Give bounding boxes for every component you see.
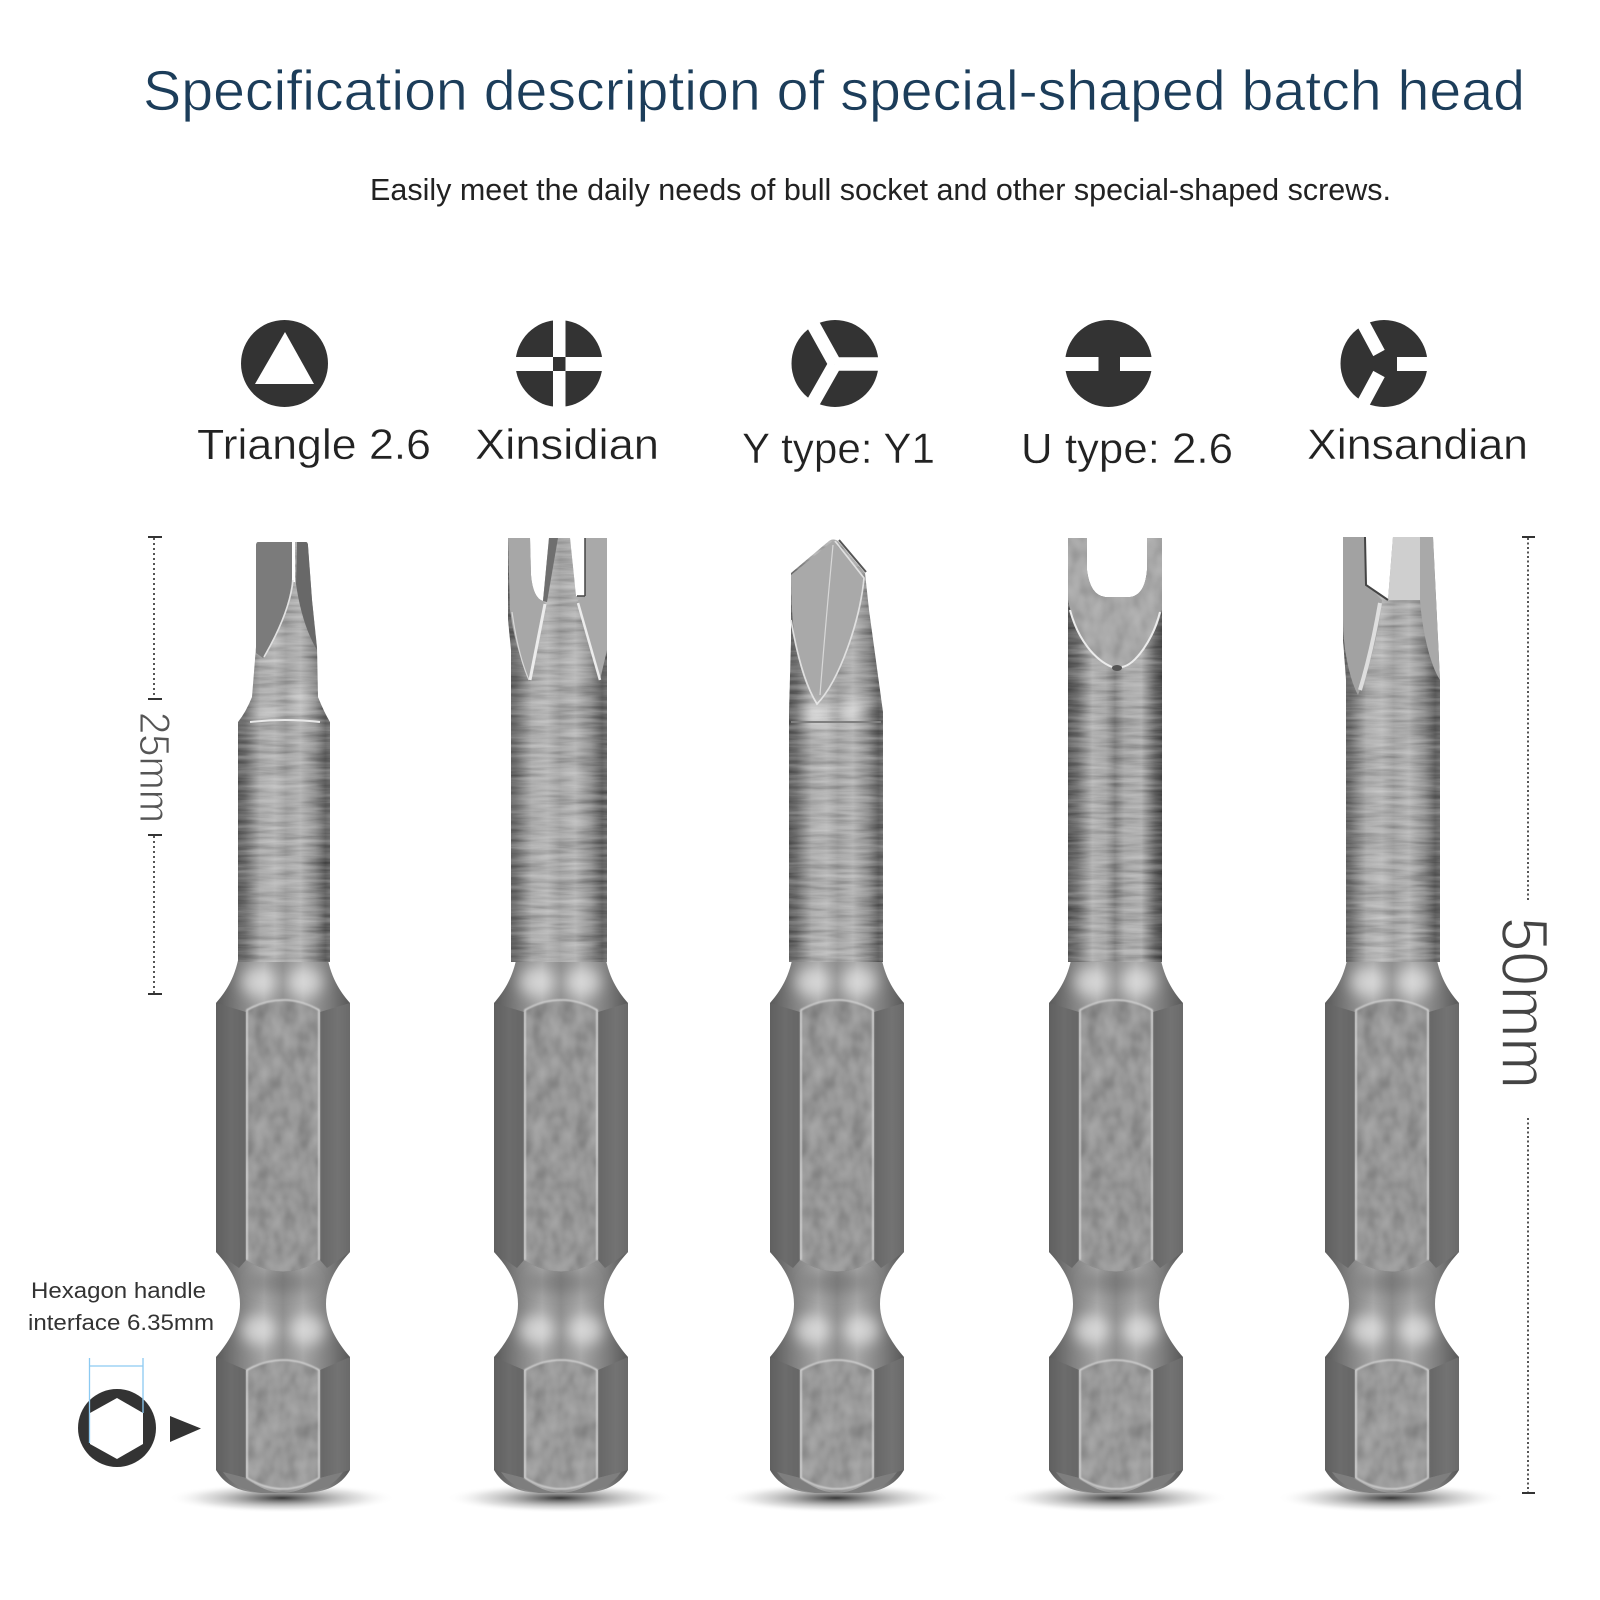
bit 2: Xinsidian — [446, 538, 674, 1513]
icon: triangle head — [241, 320, 328, 407]
dimension: 50mm total length — [1488, 537, 1562, 1493]
title: Specification description of special-shaped batch head — [143, 59, 1525, 123]
label: Xinsandian: Xinsandian — [1307, 421, 1528, 469]
arrow: pointer to hex end — [170, 1416, 201, 1442]
bit 1: triangle — [168, 542, 396, 1513]
icon: Y type head — [792, 319, 882, 408]
bit 3: Y type — [722, 540, 950, 1513]
dimension: 50mm total length: 50mm — [1488, 917, 1562, 1089]
callout: hexagon handle interface: Hexagon handle — [31, 1278, 206, 1303]
bit 4: U type — [1001, 538, 1229, 1513]
label: U type: 2.6: U type: 2.6 — [1021, 425, 1233, 473]
icon: hexagon cross-section — [78, 1358, 156, 1467]
label: Triangle 2.6: Triangle 2.6 — [197, 421, 431, 469]
icon: U type head — [1062, 320, 1156, 407]
callout: hexagon handle interface — [28, 1278, 214, 1467]
icon: Xinsidian head — [514, 318, 604, 409]
label: Y type: Y1: Y type: Y1 — [742, 425, 935, 473]
bit 5: Xinsandian — [1277, 537, 1505, 1513]
dimension: 25mm working length — [130, 537, 178, 994]
icon: Xinsandian head — [1340, 314, 1431, 413]
dimension: 25mm working length: 25mm — [130, 712, 178, 823]
callout: hexagon handle interface: interface 6.35mm — [28, 1310, 214, 1335]
subtitle: Easily meet the daily needs of bull socket and other special-shaped screws. — [370, 172, 1391, 207]
label: Xinsidian: Xinsidian — [475, 421, 659, 469]
